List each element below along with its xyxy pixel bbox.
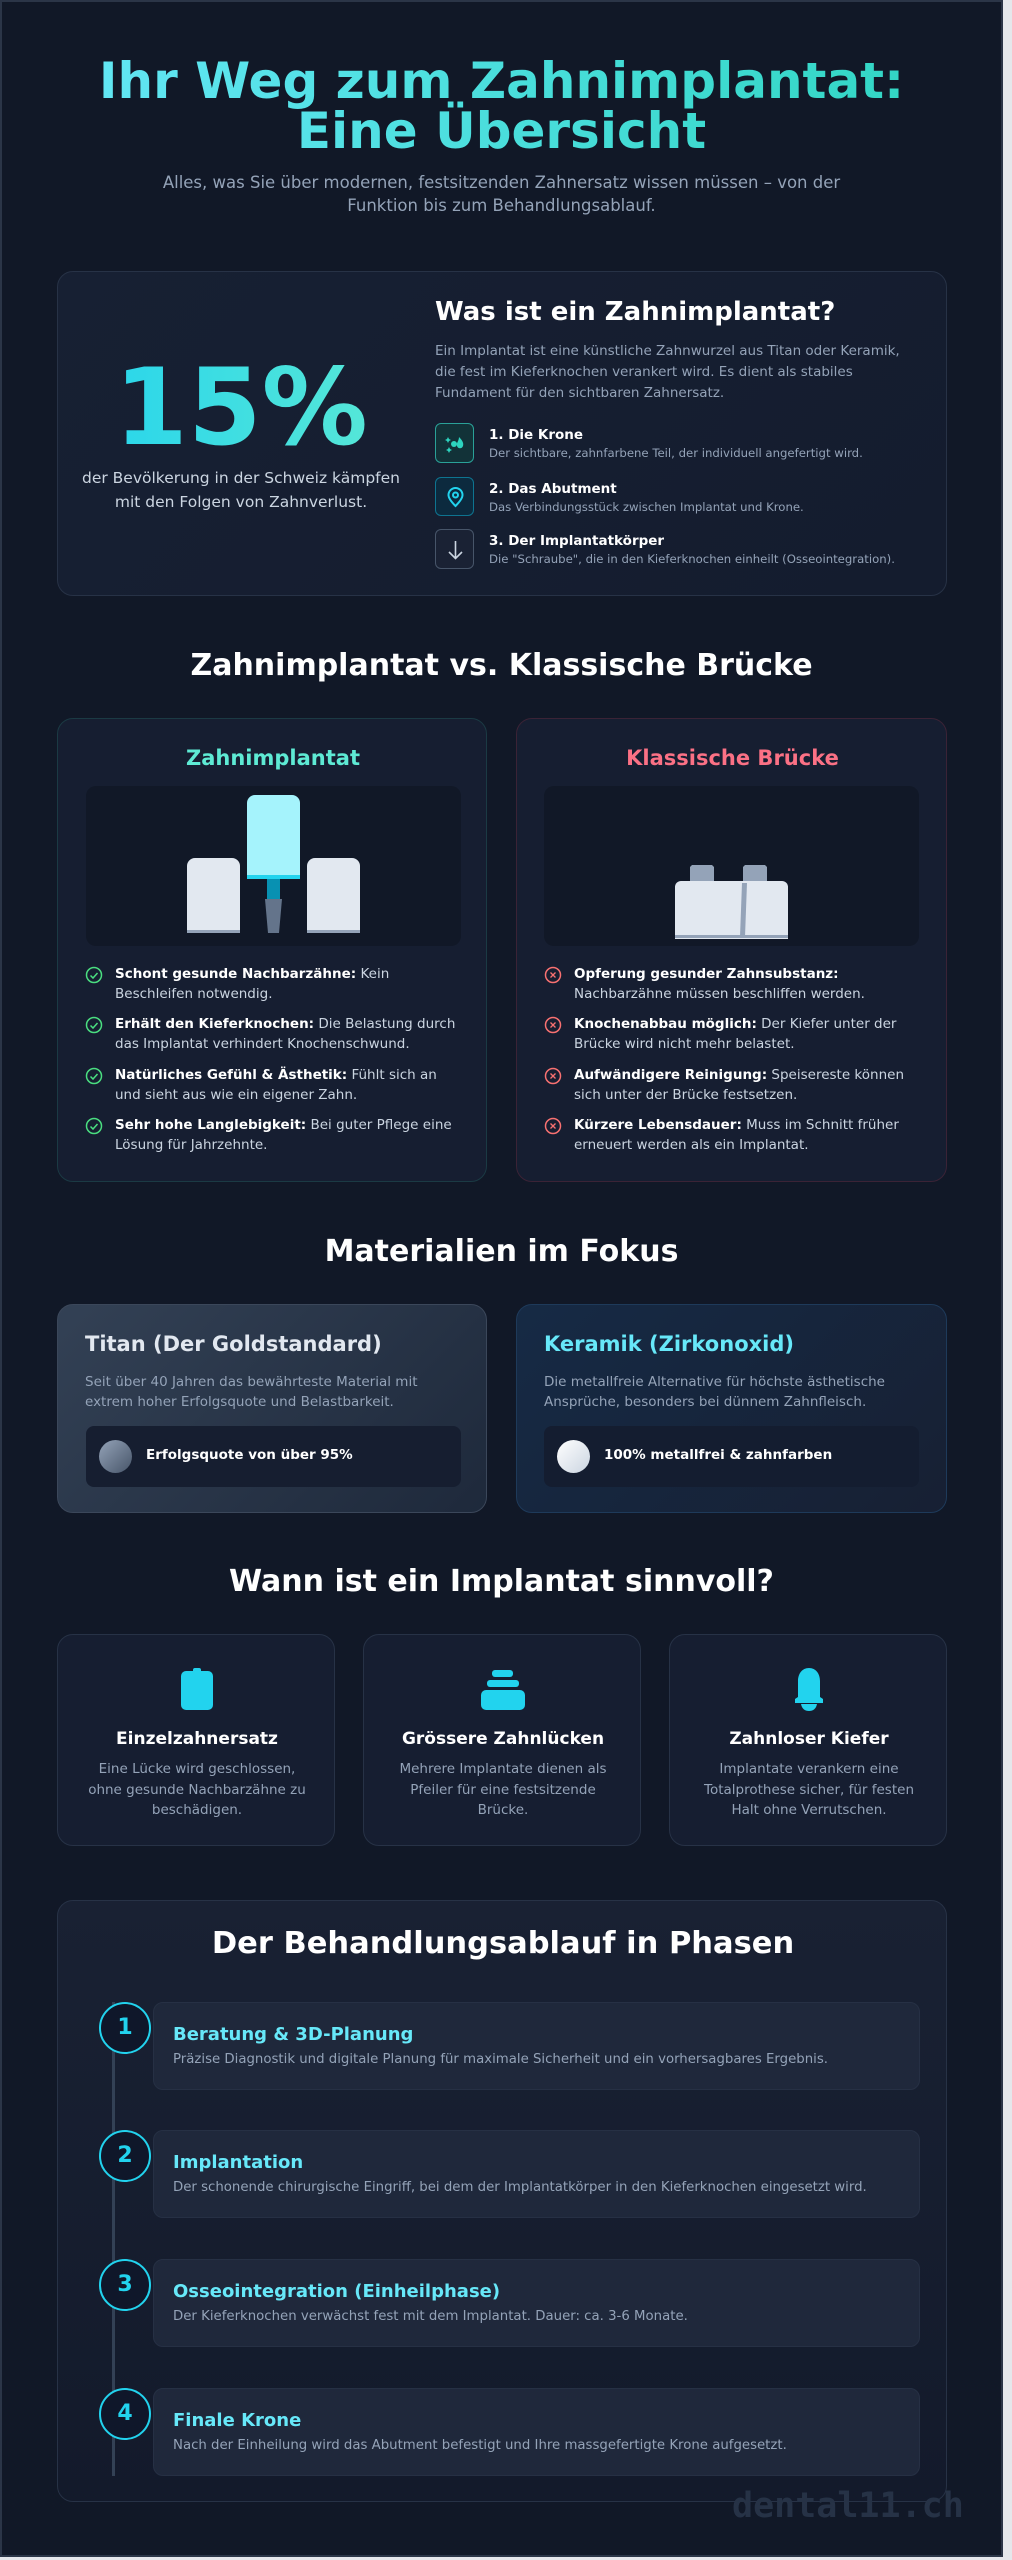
card: Zahnloser Kiefer	[669, 1634, 947, 1846]
panel: Zahnimplantat	[57, 718, 487, 1182]
watermark: dental11.ch	[732, 2486, 964, 2526]
icon: stack	[481, 1670, 525, 1710]
item: Abutment: 2. Das Abutment	[489, 481, 617, 497]
panel: intro	[57, 271, 947, 596]
step 3: 3	[117, 2272, 133, 2297]
step 2	[99, 2130, 920, 2218]
icon: sparkle	[435, 423, 474, 463]
item: Implantatkörper: 3. Der Implantatkörper	[489, 533, 664, 549]
cons list	[544, 966, 904, 1153]
pros list: Sehr hohe Langlebigkeit: Bei guter Pflege eine Lösung für Jahrzehnte.	[115, 1117, 452, 1153]
stat caption: der Bevölkerung in der Schweiz kämpfen mit den Folgen von Zahnverlust.	[82, 469, 400, 511]
item: Abutment: Das Verbindungsstück zwischen Implantat und Krone.	[489, 500, 804, 514]
icon: bell	[795, 1668, 823, 1711]
panel: Titan: Titan (Der Goldstandard)	[85, 1332, 382, 1356]
text: Die metallfreie Alternative für höchste ästhetische Ansprüche, besonders bei dünnem Zahnfleisch.	[544, 1374, 885, 1410]
item: Abutment	[435, 477, 804, 516]
cons list: Aufwändigere Reinigung: Speisereste können sich unter der Brücke festsetzen.	[574, 1067, 904, 1103]
card: Einzelzahnersatz: Eine Lücke wird geschlossen, ohne gesunde Nachbarzähne zu beschädigen.	[88, 1761, 306, 1818]
cons list: Kürzere Lebensdauer: Muss im Schnitt früher erneuert werden als ein Implantat.	[574, 1117, 899, 1153]
item: Krone: 1. Die Krone	[489, 427, 583, 443]
step 1: Präzise Diagnostik und digitale Planung für maximale Sicherheit und ein vorhersagbares Ergebnis.	[173, 2052, 828, 2067]
card: Einzelzahnersatz	[57, 1634, 335, 1846]
step 4	[99, 2388, 920, 2476]
stat: 15%	[58, 348, 424, 468]
item: Implantatkörper	[435, 529, 895, 569]
panel: Keramik	[516, 1304, 947, 1513]
panel: Titan	[57, 1304, 487, 1513]
panel: Keramik: Keramik (Zirkonoxid)	[544, 1332, 794, 1356]
pros list	[86, 966, 455, 1153]
cons list: Knochenabbau möglich: Der Kiefer unter der Brücke wird nicht mehr belastet.	[574, 1016, 896, 1052]
badge: 100% metallfrei & zahnfarben	[604, 1447, 832, 1463]
step 3	[99, 2259, 920, 2347]
stat: 15%: 15%	[114, 346, 368, 469]
title: Ihr Weg zum Zahnimplantat:	[99, 52, 904, 110]
card title: Zahnimplantat	[186, 746, 360, 770]
badge	[544, 1426, 919, 1487]
icon: battery	[181, 1668, 213, 1710]
cons list: Opferung gesunder Zahnsubstanz: Nachbarzähne müssen beschliffen werden.	[574, 966, 865, 1002]
card: Zahnloser Kiefer: Implantate verankern eine Totalprothese sicher, für festen Halt ohne Verrutschen.	[704, 1761, 914, 1818]
intro text: Ein Implantat ist eine künstliche Zahnwurzel aus Titan oder Keramik, die fest im Kieferknochen verankert wird. Es dient als stabiles Fundament für den sichtbaren Zahnersatz.	[435, 343, 900, 401]
heading: when: Wann ist ein Implantat sinnvoll?	[229, 1564, 774, 1599]
card title: Klassische Brücke	[626, 746, 839, 770]
title	[0, 56, 1003, 156]
card: Grössere Zahnlücken: Mehrere Implantate dienen als Pfeiler für eine festsitzende Brücke.	[399, 1761, 607, 1818]
step 2: Der schonende chirurgische Eingriff, bei dem der Implantatkörper in den Kieferknochen eingesetzt wird.	[173, 2180, 867, 2195]
step 2: 2	[117, 2143, 133, 2168]
pros list: Natürliches Gefühl & Ästhetik: Fühlt sich an und sieht aus wie ein eigener Zahn.	[115, 1067, 437, 1103]
step 3: Der Kieferknochen verwächst fest mit dem Implantat. Dauer: ca. 3-6 Monate.	[173, 2309, 688, 2324]
card: Zahnloser Kiefer: Zahnloser Kiefer	[729, 1729, 889, 1749]
illustration: bridge	[544, 786, 919, 946]
step 1	[99, 2002, 920, 2090]
item: Krone	[435, 423, 863, 463]
panel: Klassische Brücke	[516, 718, 947, 1182]
icon: pin	[435, 477, 474, 516]
item: Krone: Der sichtbare, zahnfarbene Teil, der individuell angefertigt wird.	[489, 446, 863, 460]
pros list: Schont gesunde Nachbarzähne: Kein Beschleifen notwendig.	[115, 966, 389, 1002]
card: Grössere Zahnlücken	[363, 1634, 641, 1846]
step 4: Finale Krone	[173, 2410, 301, 2431]
text: Seit über 40 Jahren das bewährteste Material mit extrem hoher Erfolgsquote und Belastbarkeit.	[85, 1374, 417, 1410]
heading: Was ist ein Zahnimplantat: Was ist ein Zahnimplantat?	[435, 297, 835, 327]
step 4: Nach der Einheilung wird das Abutment befestigt und Ihre massgefertigte Krone aufgesetzt.	[173, 2438, 787, 2453]
icon: arrow down	[435, 529, 474, 569]
subtitle: Alles, was Sie über modernen, festsitzenden Zahnersatz wissen müssen – von der Funktion bis zum Behandlungsablauf.	[163, 173, 840, 215]
badge: Erfolgsquote von über 95%	[146, 1447, 353, 1463]
step 2: Implantation	[173, 2152, 303, 2173]
step 1: Beratung & 3D-Planung	[173, 2024, 413, 2045]
heading: comparison: Zahnimplantat vs. Klassische Brücke	[190, 648, 813, 683]
step 1: 1	[117, 2015, 133, 2040]
heading: phases: Der Behandlungsablauf in Phasen	[212, 1926, 794, 1961]
pros list: Erhält den Kieferknochen: Die Belastung durch das Implantat verhindert Knochenschwund.	[115, 1016, 455, 1052]
card: Grössere Zahnlücken: Grössere Zahnlücken	[402, 1729, 604, 1749]
item: Implantatkörper: Die "Schraube", die in den Kieferknochen einheilt (Osseointegration).	[489, 552, 895, 566]
title: Eine Übersicht	[297, 102, 706, 160]
step 4: 4	[117, 2401, 133, 2426]
heading: materials: Materialien im Fokus	[325, 1234, 678, 1269]
timeline line	[112, 2002, 115, 2476]
badge	[86, 1426, 461, 1487]
step 3: Osseointegration (Einheilphase)	[173, 2281, 500, 2302]
card: Einzelzahnersatz: Einzelzahnersatz	[116, 1729, 278, 1749]
panel: phases	[57, 1900, 947, 2502]
illustration: implant	[86, 786, 461, 946]
